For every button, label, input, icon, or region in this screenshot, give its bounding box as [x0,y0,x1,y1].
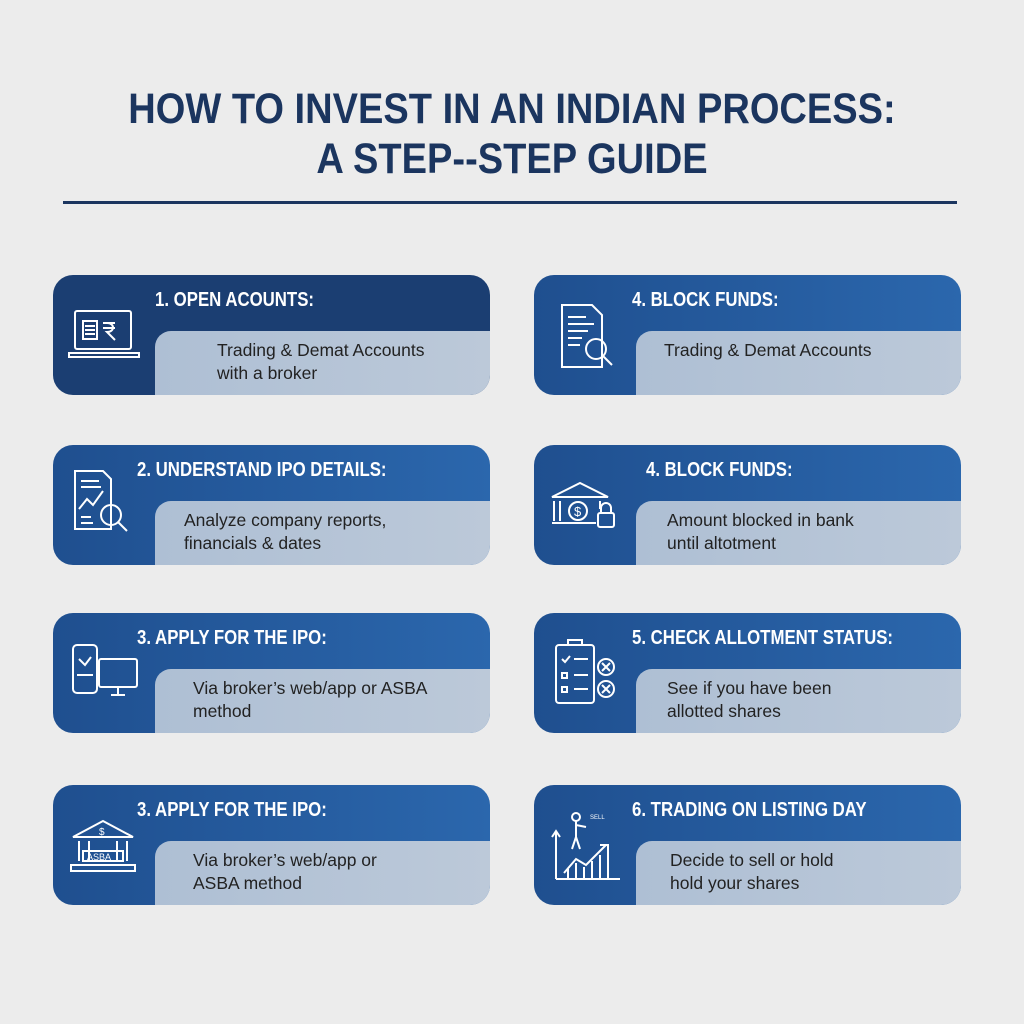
text [667,678,831,721]
icon: bank ASBA: $ [99,827,105,838]
card: 3 apply (b) [53,785,490,905]
text: Decide to sell or hold [670,850,833,870]
title: A STEP--STEP GUIDE [316,135,708,183]
heading: 5. CHECK ALLOTMENT STATUS: [632,627,893,649]
icon: person on rising chart: SELL [590,815,605,821]
text: until altotment [667,533,776,553]
heading: 4. BLOCK FUNDS: [646,459,793,481]
text: Via broker’s web/app or [193,850,377,870]
text: hold your shares [670,873,799,893]
text [193,678,428,721]
text: Analyze company reports, [184,510,386,530]
card: 2 understand IPO [53,445,490,565]
text [670,850,833,893]
heading: 3. APPLY FOR THE IPO: [137,799,327,821]
text [193,850,377,893]
icon: bank lock [552,482,615,528]
icon: bank lock: $ [574,504,582,519]
heading: 3. APPLY FOR THE IPO: [137,627,327,649]
text [667,510,854,553]
card: 4 block funds (top) [534,275,961,395]
icon: bank ASBA [70,820,136,872]
heading: 6. TRADING ON LISTING DAY [632,799,867,821]
text: with a broker [217,363,317,383]
text: financials & dates [184,533,321,553]
text: Trading & Demat Accounts [217,340,425,360]
heading: 4. BLOCK FUNDS: [632,289,779,311]
title: HOW TO INVEST IN AN INDIAN PROCESS: [128,85,896,133]
text: See if you have been [667,678,831,698]
text: ASBA method [193,873,302,893]
icon: bank ASBA: ASBA [87,852,111,862]
icon: document magnifier [561,304,613,368]
text: Amount blocked in bank [667,510,854,530]
text [184,510,386,553]
heading: 1. OPEN ACOUNTS: [155,289,314,311]
icon: person on rising chart [551,812,620,880]
icon: laptop [68,310,140,358]
text [217,340,425,383]
card: 4 block funds [534,445,961,565]
text: Via broker’s web/app or ASBA [193,678,427,698]
heading: 2. UNDERSTAND IPO DETAILS: [137,459,387,481]
card: 6 trading listing day [534,785,961,905]
icon: checklist [555,639,615,704]
card: 1 open accounts [53,275,490,395]
title [128,85,896,183]
text: Trading & Demat Accounts [664,340,872,360]
text: method [193,701,251,721]
icon: phone and monitor [72,644,138,696]
card: 3 apply (a) [53,613,490,733]
card: 5 check allotment [534,613,961,733]
text: allotted shares [667,701,781,721]
icon: report analysis [74,470,128,532]
